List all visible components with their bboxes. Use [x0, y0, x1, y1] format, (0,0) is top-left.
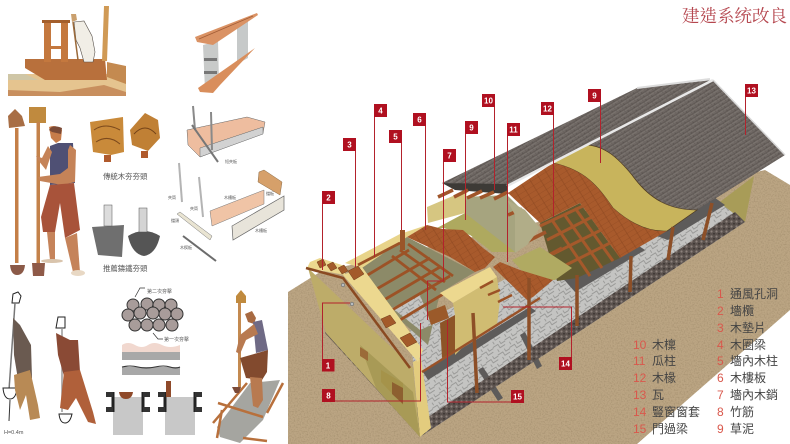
legend: numbered parts: 15: [633, 422, 647, 436]
callout 6: floor board: 6: [417, 116, 422, 124]
callout 14: window frame: 14: [561, 360, 570, 368]
callout 1: vent hole: [322, 303, 350, 372]
panel: traditional rammed earth wall scene: [8, 6, 126, 96]
callout 1: vent hole: 1: [326, 362, 331, 370]
window: [360, 347, 368, 361]
callout 9b: straw mud, roof: [588, 89, 601, 163]
paving floor: [410, 180, 745, 437]
gable wall face: [308, 268, 420, 437]
callout 6: floor board: [413, 113, 426, 230]
panel: house cutaway axonometric: [288, 79, 790, 444]
callout 15: door lintel: [448, 320, 524, 403]
interior paving: [392, 295, 432, 330]
floor shadows: [423, 190, 725, 401]
legend: numbered parts: 9: [717, 422, 724, 436]
diagram: ramming in formwork sections: [106, 381, 202, 435]
legend: numbered parts: 木椽: [652, 371, 676, 385]
diagram: soil surface sections: [122, 343, 180, 375]
back ridge cap: [637, 79, 710, 88]
callout 9a: straw mud, back: [465, 121, 478, 220]
callout 7: wall dowel: 7: [447, 152, 452, 160]
back wall interior: [465, 195, 540, 253]
panel: exploded formwork parts: [168, 106, 284, 261]
callout 11: short post: 11: [509, 126, 518, 134]
straw level floor: [437, 213, 515, 252]
legend: numbered parts: 木樓板: [730, 370, 766, 385]
legend: numbered parts: 墻內木柱: [730, 353, 778, 368]
callout 10: purlin: 10: [484, 96, 493, 106]
legend: numbered parts: 瓦: [652, 388, 664, 402]
upper floor board: [407, 225, 495, 272]
back roof slope: [442, 80, 713, 185]
legend: numbered parts: 竹筋: [730, 405, 754, 419]
callout 13: tile: 13: [747, 86, 756, 96]
callout 15: door lintel: 15: [513, 392, 522, 402]
left room beams: [358, 243, 460, 320]
small part labels: 擋頭: [171, 217, 179, 223]
legend: numbered parts: 7: [717, 388, 724, 402]
legend: numbered parts: 5: [717, 354, 724, 368]
long eave beam: [422, 298, 540, 372]
legend: numbered parts: 木檁: [652, 337, 676, 352]
wall post: [400, 230, 405, 250]
callout 2: wall cap: 2: [326, 194, 331, 202]
caption: first tamping: 第一次夯擊: [164, 336, 189, 343]
callout 4: ring beam: 4: [378, 106, 383, 116]
vent holes: [341, 283, 354, 306]
legend: numbered parts: 墻內木銷: [730, 388, 778, 402]
wood rafter board: [508, 163, 667, 258]
small part labels: 夾筒: [190, 205, 198, 211]
callout 5: wall post: 5: [393, 132, 398, 142]
left room interior: [362, 237, 475, 345]
wall edge: [413, 358, 431, 437]
legend: numbered parts: 12: [633, 371, 647, 385]
columns: [473, 203, 712, 393]
door opening: [381, 370, 403, 405]
small part labels: 擋板: [266, 190, 274, 196]
legend: numbered parts: 通風孔洞: [730, 286, 778, 301]
panel: worker standing on formwork: [213, 290, 283, 443]
callout 14: window frame: [503, 307, 572, 370]
gable wall shade: [360, 345, 420, 437]
callout 12: rafter: 12: [543, 104, 552, 114]
front short wall face: [453, 277, 500, 355]
purlins on back wall: [438, 190, 562, 260]
ridge cap: [507, 80, 713, 186]
small part labels: 短夾板: [225, 158, 237, 164]
legend: numbered parts: 3: [717, 321, 724, 335]
panel: two workers ramming: [3, 292, 96, 436]
legend: numbered parts: 豎窗窗套: [652, 405, 700, 419]
callout 9a: straw mud, back: 9: [469, 124, 474, 132]
callout 8: bamboo rib: [322, 323, 420, 402]
callout 5: wall post: [389, 130, 402, 230]
stone foundation strip: [420, 212, 745, 437]
callout 12: rafter: [541, 102, 554, 217]
gable top band: [343, 267, 423, 362]
legend: numbered parts: 4: [717, 338, 724, 352]
callout 3: wood pad: 3: [347, 140, 352, 150]
panel: worker with wooden rammers: [8, 107, 85, 276]
back wall pale band: [427, 190, 467, 223]
callout 11: short post: [507, 123, 520, 262]
caption: second tamping: 第二次夯擊: [147, 288, 172, 295]
callout 13: tile: [745, 84, 758, 135]
panel: assembled timber formwork: [195, 13, 258, 93]
legend: numbered parts: 木圈梁: [730, 338, 766, 352]
diagram: tamping pattern circles: [122, 288, 189, 343]
legend: numbered parts: 2: [717, 304, 724, 318]
left room back band: [345, 225, 427, 268]
panel: traditional wooden rammer heads: [90, 113, 160, 181]
legend: numbered parts: 11: [633, 354, 646, 368]
height label: H=0.4m: [4, 430, 24, 436]
small part labels: 木楔板: [180, 244, 192, 250]
small part labels: 木槽板: [255, 227, 267, 233]
legend: numbered parts: 門過梁: [652, 421, 688, 436]
title: 建造系统改良: [682, 6, 787, 26]
small part labels: 夾筒: [168, 194, 176, 200]
front short wall top: [440, 267, 497, 303]
roof tile slope: [587, 80, 785, 210]
callout 8: bamboo rib: 8: [326, 392, 331, 400]
small part labels: 木槽板: [224, 194, 236, 200]
legend: numbered parts: 草泥: [730, 422, 754, 436]
callout 3: wood pad: [343, 138, 356, 267]
lower olive floor: [512, 247, 572, 280]
central wood platform: [493, 262, 553, 300]
callout 7: wall dowel: [428, 149, 456, 320]
wall top purlins: [480, 281, 512, 302]
legend: numbered parts: 瓜柱: [652, 353, 676, 368]
straw mud layer: [553, 145, 697, 231]
gable stepped cap: [307, 258, 345, 275]
wall top wood blocks: [317, 259, 417, 347]
back eave shadow strip: [442, 183, 507, 194]
legend: numbered parts: 10: [633, 338, 647, 352]
roof edge strip: [306, 268, 410, 368]
callout 9b: straw mud, roof: 9: [592, 92, 597, 100]
callout 4: ring beam: [374, 104, 387, 257]
callout 2: wall cap: [322, 191, 335, 270]
pale pillar block: [507, 200, 540, 253]
gable eave edge: [713, 80, 785, 155]
legend: numbered parts: 14: [633, 405, 647, 419]
far gable wall: [712, 176, 754, 222]
legend: numbered parts: 木墊片: [730, 321, 766, 335]
panel: recommended cast iron rammer heads: [92, 205, 160, 273]
gable stone base: [325, 325, 428, 437]
legend: numbered parts: 13: [633, 388, 647, 402]
callout 10: purlin: [482, 94, 495, 190]
rafter lattice: [540, 203, 620, 281]
ground: [288, 170, 790, 444]
legend: numbered parts: 墻欖: [730, 303, 754, 318]
door with lintel: [440, 315, 455, 358]
legend: numbered parts: [633, 286, 778, 436]
caption: iron heads: 推薦鑄鐵夯頭: [103, 264, 148, 273]
small part labels: [168, 158, 274, 250]
caption: wooden heads: 傳統木夯夯頭: [103, 172, 148, 181]
legend: numbered parts: 1: [717, 287, 724, 301]
legend: numbered parts: 8: [717, 405, 724, 419]
legend: numbered parts: 6: [717, 371, 724, 385]
